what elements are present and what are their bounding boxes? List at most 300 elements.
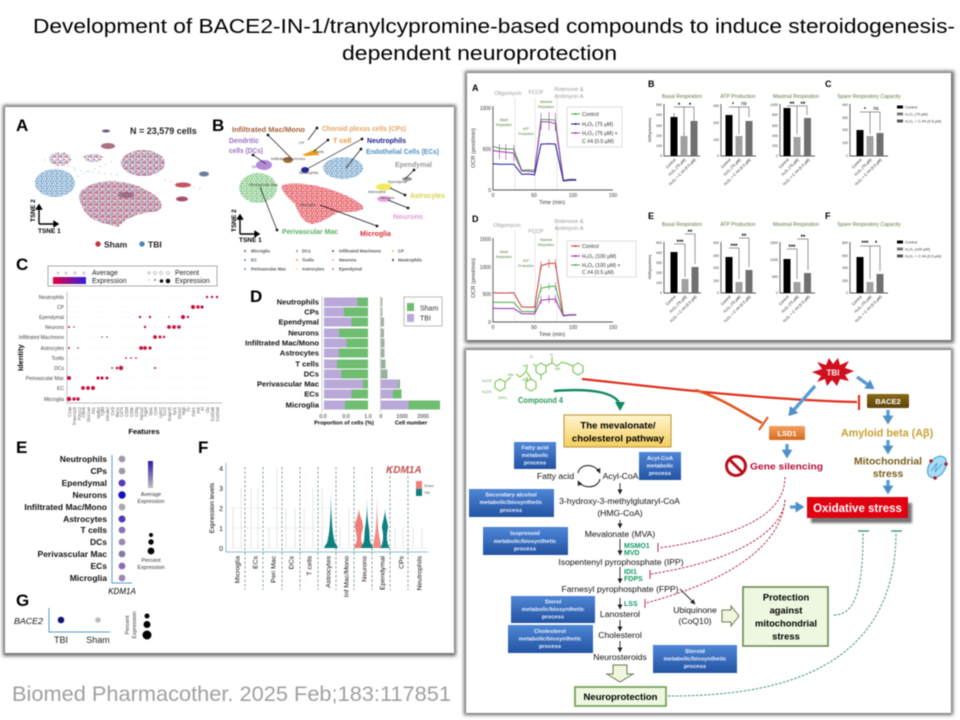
label: mitochondrial stress [854,456,922,480]
chart: ATP production: 0 [717,154,719,158]
panel F: KDM1A violin plot: 0 [219,546,223,553]
chart F: spare respiratory capacity (100 µM): F [825,211,831,221]
chart: maximal respiration: 600 [772,124,778,128]
identity labels: Perivascular Mac [26,376,64,382]
legend: cell types: Perivascular Mac [251,266,287,272]
legend: Sham and TBI: Sham [420,306,438,312]
chart: basal respiration: Control [665,295,677,306]
pathway metabolites: Ubiquinone [673,605,717,615]
heading: mevalonate pathway: cholesterol pathway [572,434,665,444]
panel B: tSNE by cell type: TSNE 2 [231,209,238,232]
panel A: tSNE by condition: TSNE 2 [30,199,37,222]
feature labels: Kl [200,407,205,411]
identity labels: Neurons [45,325,64,331]
chart: ATP production: * [732,102,734,108]
proportion stacked bars [324,298,368,410]
panel E: KDM1A dot plot: KDM1A [108,587,136,596]
cell type labels: Neurons [393,212,423,221]
panel F: KDM1A violin plot: 3 [219,486,223,493]
identity labels: EC [57,386,64,392]
legend [897,106,942,124]
chart: basal respiration: OCR(pmol/min) [648,118,652,142]
chart D: OCR time course (H2O2 100 µM): 50 [531,325,537,331]
enzyme labels: LSS [624,601,638,608]
panel D: proportion and count bars: Cell number [395,420,428,426]
row labels: CPs [304,308,319,316]
box: isoprenoid process: metabolic/biosynthetic [494,539,557,545]
chart F: spare respiratory capacity (100 µM): Spare Respiratory Capacity [837,222,901,228]
enzyme labels: FDPS [624,576,643,583]
series: control, H2O2, compound [493,263,576,316]
chart: basal respiration: Basal Respiration [662,222,702,228]
pathway metabolites: Cholesterol [598,630,642,640]
chart: ATP production: 200 [713,121,719,125]
identity labels: DCs [54,366,64,372]
chart C: spare respiratory capacity (75 µM) [825,79,942,186]
box: BACE2: BACE2 [875,397,901,406]
legend: cell types: Infiltrated Mac/mono [339,248,381,254]
box: cholesterol process: metabolic/biosynthetic [519,636,582,642]
heading: mevalonate pathway: The mevalonate/ [580,420,656,432]
panel G: BACE2 dot plot [14,591,152,645]
chart: maximal respiration: 800 [772,113,778,117]
panel E: KDM1A dot plot: Infiltrated Mac/Mono [24,502,107,512]
chart A: OCR time course (H2O2 75 µM): Production [518,132,534,136]
chart: maximal respiration: 1500 [770,241,778,245]
legend: dot plot: Average [92,270,118,277]
pathway metabolites [537,471,717,662]
legend: percent expression: Expression [132,611,138,639]
box: protection against mitochondrial stress [743,587,828,646]
legend: Sham and TBI: Sham [104,240,128,250]
box: neuroprotection [575,687,666,706]
feature labels: Ly6c2 [158,406,163,418]
legend: Sham and TBI: TBI [420,316,431,322]
chart F: spare respiratory capacity (100 µM): 200 [842,279,848,283]
pathway metabolites: Fatty acid [537,471,574,481]
feature labels: Gja1 [148,406,153,416]
injection labels [494,87,584,100]
legend: H₂O₂ (100 µM) + [582,263,621,269]
hollow arrow to neuroprotection [607,665,633,682]
chart D: OCR time course (H2O2 100 µM): 150 [609,325,617,331]
chart: ATP production: 300 [713,104,719,108]
feature labels: S100a8 [210,406,215,421]
box: protection against mitochondrial stress: against [770,604,802,616]
chart D: OCR time course (H2O2 100 µM): Production [518,264,534,268]
box: steroid process: Steroid [685,649,705,655]
chart C: spare respiratory capacity (75 µM): 200 [842,128,848,132]
chart A: OCR time course (H2O2 75 µM): 0 [488,188,491,194]
chart: ATP production: 100 [713,279,719,283]
box: steroid process: metabolic/biosynthetic [664,656,727,662]
chart: basal respiration: 0 [660,154,662,158]
chart A: OCR time course (H2O2 75 µM): Time (min) [539,200,565,206]
legend: cell types: Tcells [302,258,314,262]
box: protection against mitochondrial stress: Protection [763,592,809,602]
label: Compound 4: Compound 4 [518,396,563,405]
chart: ATP production: Control [720,295,732,306]
blue arrows [787,377,888,507]
legend: cell types: Microglia [251,248,270,254]
box: fatty acid process: Fatty acid [521,446,549,452]
enzyme labels: MVD [624,550,640,557]
identity labels [19,295,65,403]
charts B: basal, ATP and maximal respiration (75 µM) [648,79,819,186]
row labels [245,298,320,410]
box: cholesterol process [508,625,593,653]
chart C: spare respiratory capacity (75 µM): ns [873,106,879,112]
box: acyl-CoA process: metabolic [646,464,674,470]
title: Development of BACE2-IN-1/tranylcypromine-based compounds to induce steroidogenesis- [33,16,955,38]
box: sterol process [511,596,595,623]
panel A: tSNE by condition: TSNE 1 [38,228,61,235]
label: mitochondrial stress: Mitochondrial [854,456,922,468]
chart D: OCR time course (H2O2 100 µM): Antimycin A [555,226,584,232]
chart: basal respiration: 400 [656,113,662,117]
panel: mechanism pathway [464,348,953,715]
feature labels: Slco1a4 [86,406,91,422]
legend: violin groups [416,481,434,496]
chart F: spare respiratory capacity (100 µM): 400 [842,266,848,270]
legend: Sham and TBI [404,297,442,326]
chart D: OCR time course (H2O2 100 µM): Respiration [496,255,512,259]
chart: basal respiration: ** [688,230,693,236]
chart: maximal respiration: 0 [776,154,778,158]
feature labels: Aqp4 [143,406,148,417]
icon: compound 4 structure: NH [555,367,561,371]
box: fatty acid process: metabolic [521,453,549,459]
row labels: DCs [304,370,319,378]
box: isoprenoid process: Isoprenoid [510,531,540,537]
panel G: BACE2 dot plot: TBI [54,635,68,645]
cluster annotations: Ependymal [388,180,407,184]
feature labels: P2ry12 [77,406,82,420]
chart: basal respiration: * [678,103,681,109]
feature labels: Mgp [181,406,186,415]
chart D: OCR time course (H2O2 100 µM): D [472,214,479,224]
chart C: spare respiratory capacity (75 µM): Spare Respiratory Capacity [837,94,901,100]
TSNE axes B [238,215,259,236]
pathway metabolites: Neurosteroids [593,652,647,662]
cell type axis labels: Neutrophils [416,555,424,590]
legend: violin groups: Sham [424,484,434,488]
box: fatty acid process [514,442,556,469]
identity labels: Infiltrated Mac/mono [19,335,64,341]
chart D: OCR time course (H2O2 100 µM): 1500 [480,237,491,243]
label: amyloid beta: Amyloid beta (Aβ) [841,428,934,440]
panel F: KDM1A violin plot: 2 [219,506,223,513]
feature labels: Tmem119 [72,406,77,426]
chart D: OCR time course (H2O2 100 µM): Time (min) [539,332,565,338]
cell type axis labels: Neurons [362,555,368,582]
panel B: tSNE by cell type [212,116,445,272]
axis labels: 1000 [396,414,408,420]
panel E: KDM1A dot plot: Astrocytes [63,514,107,524]
chart: maximal respiration [770,94,819,186]
feature labels: Ccr2 [162,406,167,416]
legend: Control [905,106,917,110]
panel E: KDM1A dot plot: T cells [81,525,107,535]
box: oxidative stress [807,497,912,523]
feature labels: Ttr [186,406,191,412]
cluster annotations: T cells [313,150,324,154]
chart: maximal respiration: Maximal Respiration [773,222,819,228]
chart: ATP production: 400 [713,241,719,245]
chart: ATP production: ATP Production [720,222,756,228]
legend: percent expression: Percent [142,558,161,564]
box: neuroprotection: Neuroprotection [584,692,658,703]
arrow: compound to pathway [554,390,620,405]
identity labels: Astrocytes [41,346,64,352]
box: cholesterol process: process [539,644,561,650]
box: secondary alcohol process: metabolic/biosynthetic [480,500,543,506]
icon: compound 4 structure: O [550,353,553,357]
cluster annotations: Microglia [300,203,316,207]
chart: basal respiration: 500 [656,241,662,245]
chart: ATP production: H₂O₂ + C #4 (0.5 µM) [723,157,752,186]
chart A: OCR time course (H2O2 75 µM) [471,83,622,206]
tSNE axes [36,205,58,226]
legend: cell types: Neurons [339,258,357,262]
panel G: BACE2 dot plot: BACE2 [14,616,43,626]
panel F: KDM1A violin plot: F [198,438,208,457]
legend [567,107,622,147]
cluster annotations: Neurons [380,196,394,200]
legend: Sham and TBI [95,240,162,250]
pathway metabolites: 3-hydroxy-3-methylglutaryl-CoA [559,496,680,506]
identity labels: Microglia [44,397,64,403]
feature labels [67,406,220,426]
chart: ATP production: H₂O₂ + C #4 (0.5 µM) [723,294,752,323]
icon: TBI burst: TBI [827,368,839,378]
legend: dot plot: Expression [92,278,127,285]
box: LSD1 [769,426,805,440]
chart: ATP production: H₂O₂ (75 µM) [723,157,742,177]
legend [897,240,942,258]
dashed protection lines [668,531,902,696]
chart D: OCR time course (H2O2 100 µM): Oligomycin [493,223,521,229]
feature labels: Mafb2 [96,406,101,419]
row labels: Infiltrated Mac/Mono [245,338,319,348]
panel E: KDM1A dot plot: Microglia [70,573,107,583]
chart F: spare respiratory capacity (100 µM) [825,211,942,323]
chart: ATP production [713,94,756,186]
chart A: OCR time course (H2O2 75 µM): OCR (pmol/min) [471,128,477,168]
icon: compound 4 structure: OH [522,378,528,382]
legend: H₂O₂ (75 µM) [905,112,929,116]
icon: TBI burst [812,358,854,386]
title: dependent neuroprotection [342,43,617,65]
chart A: OCR time course (H2O2 75 µM): Respiration [538,105,554,109]
enzyme labels: MSMO1 [624,543,650,550]
chart F: spare respiratory capacity (100 µM): H₂O₂ + C #4 (0.5 µM) [854,294,883,323]
chart: ATP production [713,222,756,323]
dashed inhibition from gene silencing [645,477,785,608]
axis labels: 2000 [417,414,429,420]
box: acyl-CoA process: process [649,471,671,477]
legend: cell types: Neutrophils [398,258,422,262]
panel E: KDM1A dot plot: CPs [90,466,107,476]
feature labels: Atp1a2 [139,406,144,420]
panel G: BACE2 dot plot: G [16,591,29,610]
cell number bars [381,298,440,410]
chart: basal respiration: H₂O₂ (75 µM) [668,157,687,177]
process boxes [469,442,737,673]
chart A: OCR time course (H2O2 75 µM): 150 [609,193,617,199]
cell type labels: Ependymal [395,160,432,169]
panel F: KDM1A violin plot: Expression levels [209,482,216,533]
chart: maximal respiration: 0 [776,291,778,295]
cell type labels: T cell [333,136,351,145]
chart: maximal respiration: 1000 [770,103,778,107]
chart: maximal respiration: *** [788,245,796,251]
pathway metabolites: Lanosterol [600,609,640,619]
legend: average expression: Average [141,492,161,498]
cell type axis labels: Ependymal [380,556,386,590]
chart: ATP production: 200 [713,266,719,270]
panel E: KDM1A dot plot: Ependymal [62,478,107,488]
cell type labels: Microglia [360,229,392,238]
chart A: OCR time course (H2O2 75 µM): Maximal [540,100,552,104]
legend: cell types [244,248,422,272]
pathway metabolites: Acyl-CoA [603,471,639,481]
box: secondary alcohol process [469,489,554,517]
chart: ATP production: ns [741,101,747,107]
dot plot axes [67,292,222,403]
background small dots [69,297,219,399]
chart: ATP production: ** [742,234,747,240]
legend: violin groups: TBI [424,491,430,495]
chart: basal respiration [648,222,702,323]
legend: Control [582,244,599,250]
label: mitochondrial stress: stress [873,469,904,480]
feature labels: Tgfbi [100,407,105,416]
chart: ATP production: ATP Production [720,94,756,100]
legend: average expression: Expression [137,499,165,505]
chart A: OCR time course (H2O2 75 µM): 100 [569,193,577,199]
chart: ATP production: *** [730,244,738,250]
chart: basal respiration: H₂O₂ + C #4 (0.5 µM) [669,294,698,323]
row labels: Ependymal [278,318,319,326]
chart: maximal respiration [770,222,819,323]
gene title: KDM1A [386,465,422,476]
chart: basal respiration: 200 [656,271,662,275]
inhibition lines from compound to BACE2 and LSD1 [582,379,859,430]
box: cholesterol process: Cholesterol [534,629,566,635]
box: isoprenoid process: process [514,546,536,552]
chart: ATP production: 0 [717,291,719,295]
axis labels: 0.0 [319,414,327,420]
chart: maximal respiration: ** [790,102,795,108]
chart: basal respiration: * [689,103,692,109]
box: protection against mitochondrial stress: mitochondrial [755,618,817,628]
feature labels: Cd3g [134,406,139,417]
box: sterol process: Sterol [545,600,562,606]
legend: C #4 (0.5 µM) [582,270,614,276]
chart F: spare respiratory capacity (100 µM): 800 [842,241,848,245]
panel F: KDM1A violin plot: 4 [219,466,223,473]
panel F: KDM1A violin plot: 1 [219,526,223,533]
chart: maximal respiration: 400 [772,134,778,138]
legend: average expression [137,461,165,505]
legend: cell types: Astrocytes [302,266,325,272]
icon: compound 4 structure: H₃CO [482,390,492,394]
chart D: OCR time course (H2O2 100 µM): 500 [483,292,491,298]
legend: H₂O₂ + C #4 (0.5 µM) [905,120,942,124]
cluster annotations: Astrocytes [368,190,386,194]
chart: ATP production: 100 [713,138,719,142]
cell type labels: Infiltrated Mac/Mono [232,125,306,134]
chart D: OCR time course (H2O2 100 µM): 100 [569,325,577,331]
chart: maximal respiration: 1000 [770,258,778,262]
panel G: BACE2 dot plot: Sham [86,635,110,645]
cell type axis labels: Astrocytes [326,555,332,588]
cluster annotations [249,141,407,207]
chart D: OCR time course (H2O2 100 µM): FCCP [529,229,544,235]
chart: maximal respiration: H₂O₂ + C #4 (0.5 µM) [782,294,811,323]
violin: teal and salmon shapes [324,488,390,548]
chart D: OCR time course (H2O2 100 µM): ATP [523,259,529,263]
chart: basal respiration [648,94,702,186]
legend: cell types: Ependymal [339,266,362,272]
chart: basal respiration: 100 [656,144,662,148]
legend: H₂O₂ (100 µM) [905,248,931,252]
icon: prohibition sign [726,456,746,476]
legend: H₂O₂ + C #4 (0.5 µM) [905,254,942,258]
icon: compound 4 structure: H₃CO [482,379,492,383]
chart: maximal respiration: H₂O₂ (75 µM) [781,294,800,314]
box: sterol process: metabolic/biosynthetic [522,607,585,613]
chart: basal respiration: 200 [656,134,662,138]
cell type axis labels: CPs [398,555,406,569]
charts E: basal, ATP and maximal respiration (100 µM): E [648,211,654,221]
injection labels: FCCP [529,90,544,96]
injection labels: Antimycin A [555,94,584,100]
chart: basal respiration: OCR(pmol/min) [648,255,652,279]
chart D: OCR time course (H2O2 100 µM): 0 [492,325,495,331]
panel E: KDM1A dot plot: E [16,438,27,457]
panel C: marker dot plot [16,255,222,436]
box: steroid process [653,645,737,673]
row labels: T cells [295,360,319,368]
chart C: spare respiratory capacity (75 µM): 0 [846,154,848,158]
feature labels: Cd74 [119,406,124,417]
row labels: Neutrophils [277,298,319,306]
cell type labels: Perivascular Mac [282,227,338,236]
box: oxidative stress: Oxidative stress [813,503,902,515]
chart C: spare respiratory capacity (75 µM): 100 [842,141,848,145]
cell type axis labels: ECs [252,555,260,569]
cell type labels: Choroid plexus cells (CPs) [322,124,407,133]
box: sterol process: process [542,614,564,620]
title [33,16,955,65]
legend: H₂O₂ (75 µM) + [582,131,618,137]
chart D: OCR time course (H2O2 100 µM): Maximal [540,238,552,242]
cell type labels: Astrocytes [410,191,445,200]
box: acyl-CoA process [639,452,681,480]
chart: basal respiration: Basal Respiration [662,94,702,100]
chart A: OCR time course (H2O2 75 µM): ATP [523,127,529,131]
legend: dot plot: Percent [175,270,199,277]
chart: ATP production: 300 [713,254,719,258]
chart F: spare respiratory capacity (100 µM): * [875,241,878,247]
panel: single-cell transcriptomics [3,105,456,656]
chart D: OCR time course (H2O2 100 µM) [471,214,636,338]
legend: cell types: CP [398,248,404,254]
legend: percent expression [137,533,165,571]
enzyme labels: IDI1 [624,569,637,576]
